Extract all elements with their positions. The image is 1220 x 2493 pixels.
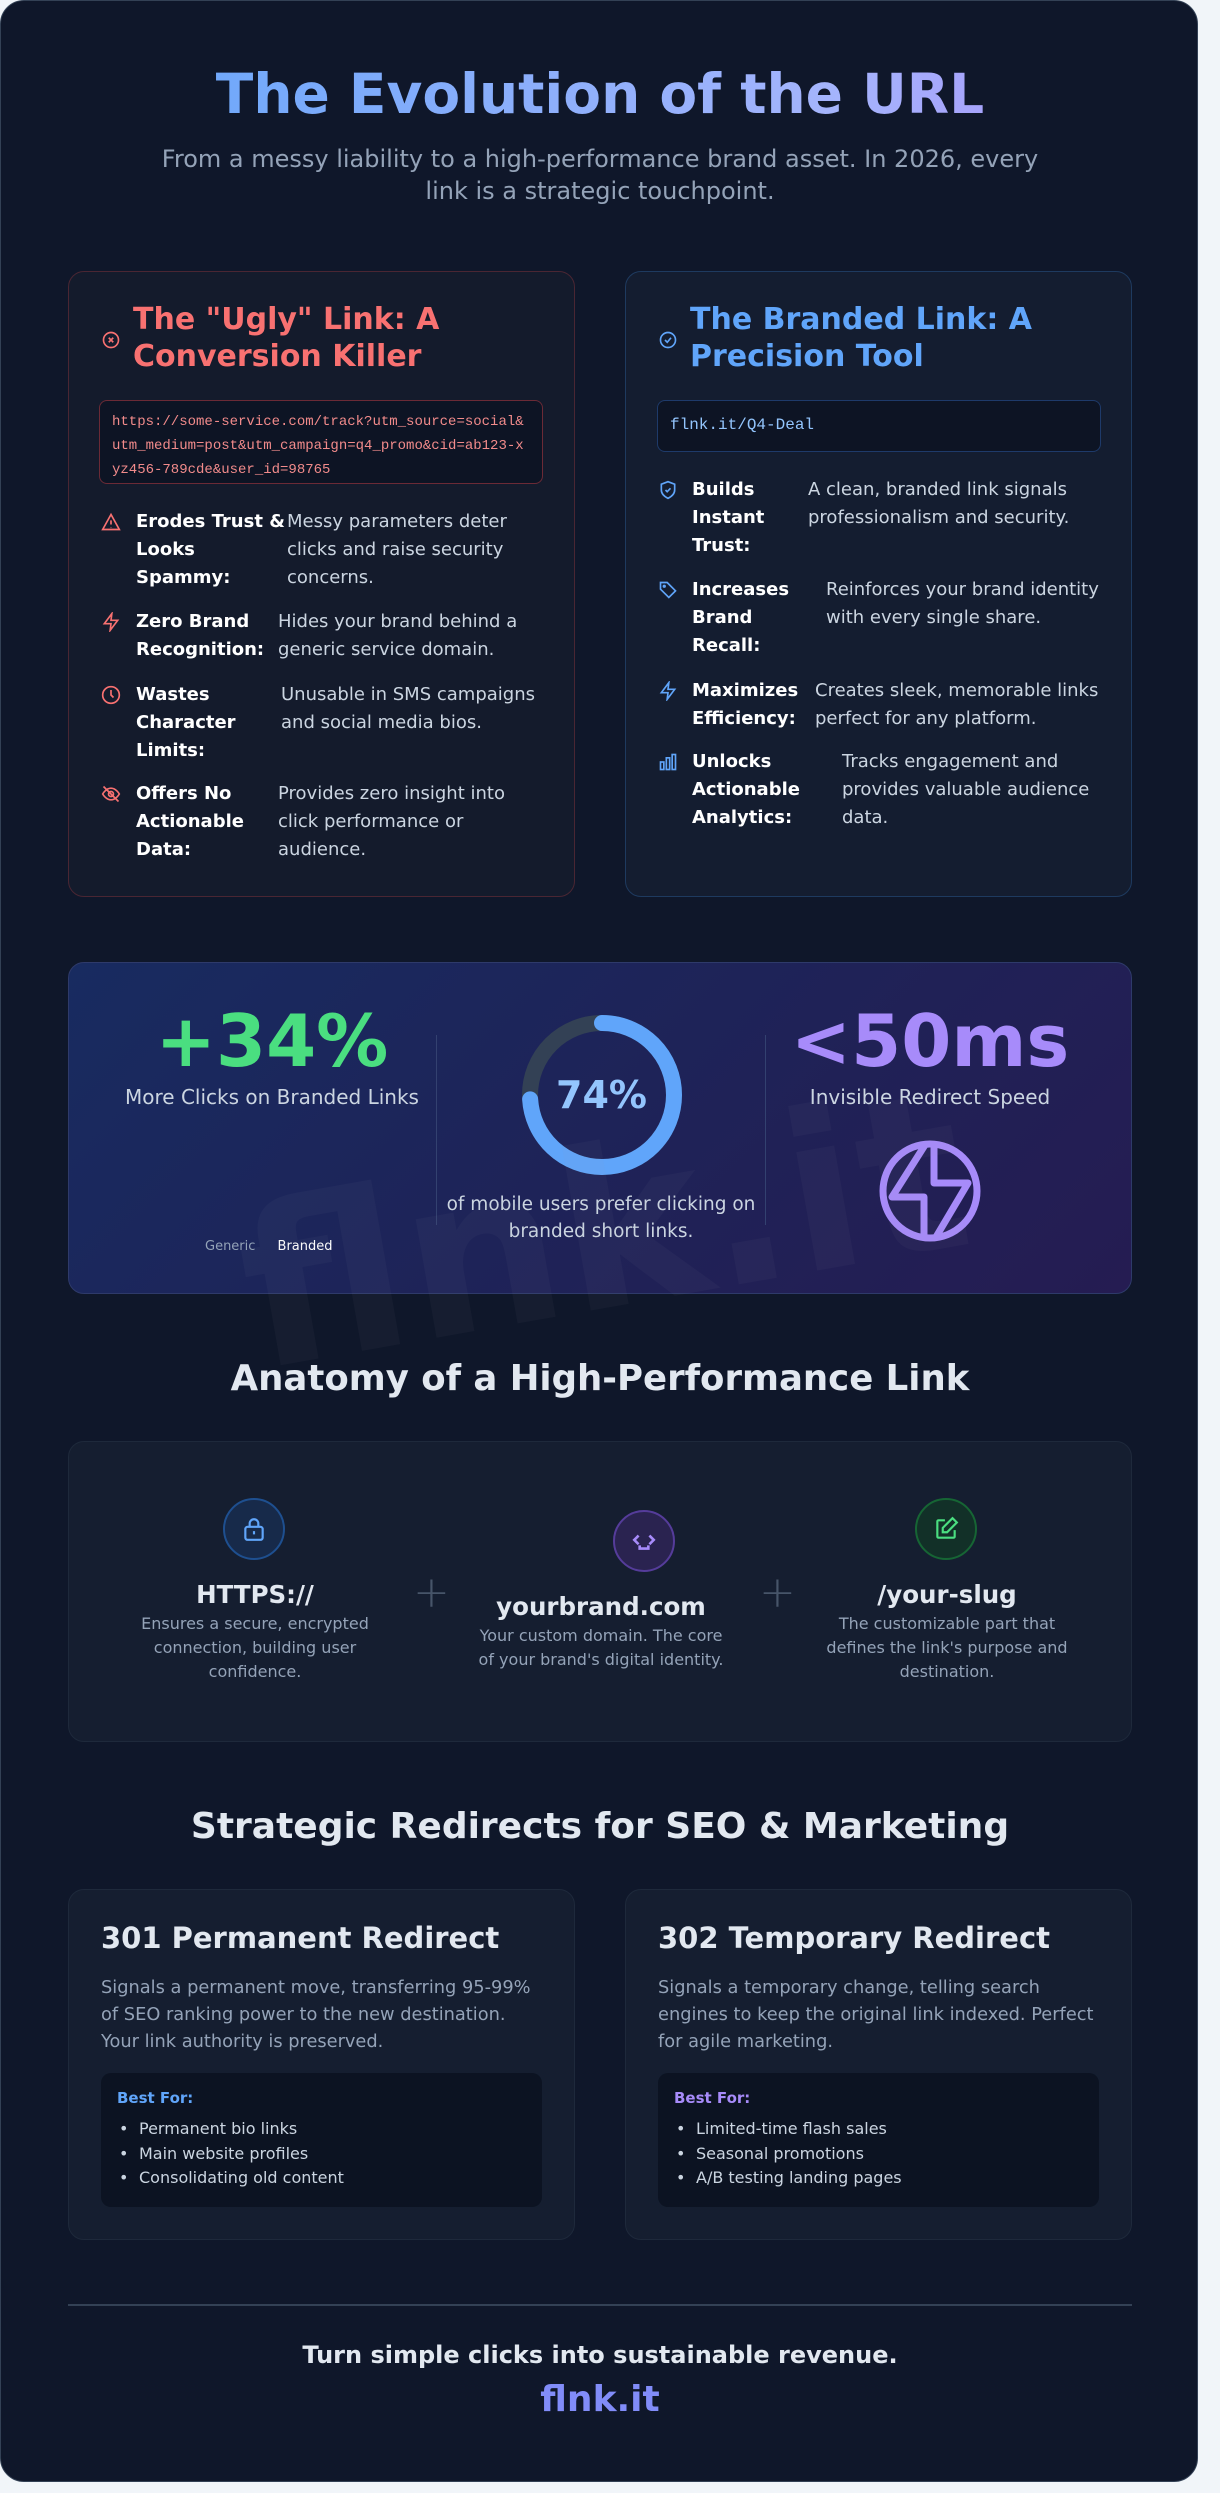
part: domain bbox=[479, 1592, 723, 1669]
item: erodes trust: Messy parameters deter clicks and raise security concerns. bbox=[287, 511, 507, 588]
heading: branded link: The Branded Link: A Precision Tool bbox=[690, 302, 1032, 374]
title bbox=[1, 59, 1199, 129]
item: analytics: Unlocks Actionable Analytics: bbox=[692, 751, 800, 828]
item: erodes trust: Erodes Trust & Looks Spammy: bbox=[136, 511, 285, 588]
panel: stats bbox=[68, 962, 1132, 1294]
item: zero brand: Hides your brand behind a generic service domain. bbox=[278, 611, 517, 660]
icon: x circle bbox=[102, 332, 120, 348]
icon: zap circle bbox=[880, 1140, 980, 1242]
part: domain: Your custom domain. The core of your brand's digital identity. bbox=[479, 1626, 723, 1669]
stat: speed: Invisible Redirect Speed bbox=[810, 1085, 1050, 1109]
icon: eye off bbox=[102, 786, 120, 802]
icon: shield bbox=[660, 480, 676, 500]
best for 302: Limited-time flash sales bbox=[696, 2119, 887, 2138]
part: https: Ensures a secure, encrypted connection, building user confidence. bbox=[141, 1614, 369, 1681]
stat: clicks bbox=[125, 999, 419, 1254]
stat: clicks: More Clicks on Branded Links bbox=[125, 1085, 419, 1109]
stat: donut: 74% bbox=[556, 1073, 647, 1117]
item: recall: Reinforces your brand identity with every single share. bbox=[826, 579, 1099, 628]
stat: donut: of mobile users prefer clicking on branded short links. bbox=[447, 1194, 755, 1242]
item: erodes trust bbox=[136, 511, 507, 588]
item: analytics bbox=[692, 751, 1089, 828]
icon: warning bbox=[101, 512, 121, 530]
watermark: flnk.it bbox=[222, 1042, 986, 1420]
best for 301 bbox=[101, 2073, 542, 2207]
branded url box bbox=[657, 400, 1101, 452]
icon: clock bbox=[102, 686, 120, 704]
heading: ugly link: The "Ugly" Link: A Conversion Killer bbox=[133, 302, 439, 374]
best for 301: Best For: bbox=[117, 2089, 193, 2107]
icon: bolt bbox=[102, 612, 120, 632]
plus: + bbox=[413, 1567, 450, 1618]
item: trust: Builds Instant Trust: bbox=[692, 479, 764, 556]
item: efficiency bbox=[692, 680, 1098, 729]
best for 302 bbox=[658, 2073, 1099, 2207]
item: wastes bbox=[136, 684, 535, 761]
divider bbox=[436, 1035, 437, 1225]
panel: 301: Signals a permanent move, transferring 95-99% of SEO ranking power to the new destination. Your link authority is preserved. bbox=[101, 1977, 531, 2052]
legend: Generic Branded bbox=[205, 1239, 333, 1254]
footer brand: flnk.it bbox=[540, 2379, 660, 2420]
item: wastes: Wastes Character Limits: bbox=[136, 684, 236, 761]
stat: clicks: +34% bbox=[156, 999, 388, 1083]
part: https bbox=[141, 1580, 369, 1681]
icon: lock bbox=[223, 1498, 285, 1560]
best for 301: Main website profiles bbox=[139, 2144, 308, 2162]
panel: 302 bbox=[625, 1889, 1132, 2240]
best for 301: Consolidating old content bbox=[139, 2168, 344, 2187]
item: analytics: Tracks engagement and provides valuable audience data. bbox=[842, 751, 1089, 828]
best for 302: Best For: bbox=[674, 2089, 750, 2107]
icon: bar chart bbox=[660, 754, 676, 770]
icon: edit bbox=[915, 1498, 977, 1560]
heading: anatomy: Anatomy of a High-Performance Link bbox=[231, 1358, 969, 1399]
part: https: HTTPS:// bbox=[196, 1580, 314, 1609]
icon: check circle bbox=[660, 332, 676, 348]
item: zero brand: Zero Brand Recognition: bbox=[136, 611, 264, 660]
panel: 301: 301 Permanent Redirect bbox=[101, 1921, 499, 1955]
panel: branded link bbox=[625, 271, 1132, 897]
item: efficiency: Maximizes Efficiency: bbox=[692, 680, 798, 729]
item: recall: Increases Brand Recall: bbox=[692, 579, 789, 656]
branded url box: flnk.it/Q4-Deal bbox=[670, 416, 814, 434]
footer tagline: Turn simple clicks into sustainable revenue. bbox=[302, 2341, 898, 2369]
plus: + bbox=[759, 1567, 796, 1618]
panel: 302: Signals a temporary change, telling search engines to keep the original link indexed. Perfect for agile marketing. bbox=[658, 1977, 1094, 2052]
stat: speed bbox=[791, 999, 1069, 1242]
heading: redirects: Strategic Redirects for SEO & Marketing bbox=[191, 1806, 1009, 1847]
best for 302: A/B testing landing pages bbox=[696, 2168, 902, 2187]
stat: donut bbox=[447, 1015, 755, 1242]
item: no data bbox=[136, 783, 505, 860]
icon: bolt blue bbox=[660, 681, 676, 701]
item: trust: A clean, branded link signals professionalism and security. bbox=[808, 479, 1069, 528]
panel: 301 bbox=[68, 1889, 575, 2240]
item: trust bbox=[692, 479, 1069, 556]
part: domain: yourbrand.com bbox=[496, 1592, 706, 1621]
item: wastes: Unusable in SMS campaigns and social media bios. bbox=[281, 684, 535, 733]
part: slug bbox=[826, 1580, 1068, 1681]
best for 301: Permanent bio links bbox=[139, 2119, 297, 2138]
icon: code bbox=[613, 1510, 675, 1572]
item: zero brand bbox=[136, 611, 517, 660]
best for 302: Seasonal promotions bbox=[696, 2144, 864, 2162]
panel: 302: 302 Temporary Redirect bbox=[658, 1921, 1050, 1955]
ugly url box: https://some-service.com/track?utm_source=social&utm_medium=post&utm_campaign=q4_promo&cid=ab123-xyz456-789cde&user_id=98765 bbox=[112, 414, 524, 478]
part: slug: The customizable part that defines the link's purpose and destination. bbox=[826, 1614, 1068, 1681]
title: The Evolution of the URL bbox=[216, 62, 984, 126]
item: recall bbox=[692, 579, 1099, 656]
subtitle: From a messy liability to a high-performance brand asset. In 2026, every link is a strategic touchpoint. bbox=[162, 145, 1038, 205]
icon: tag bbox=[660, 582, 677, 599]
panel: anatomy bbox=[68, 1441, 1132, 1742]
panel: ugly link bbox=[68, 271, 575, 897]
stat: speed: <50ms bbox=[791, 999, 1069, 1083]
item: efficiency: Creates sleek, memorable links perfect for any platform. bbox=[815, 680, 1098, 729]
part: slug: /your-slug bbox=[877, 1580, 1017, 1609]
item: no data: Offers No Actionable Data: bbox=[136, 783, 244, 860]
item: no data: Provides zero insight into click performance or audience. bbox=[278, 783, 505, 860]
divider bbox=[765, 1035, 766, 1225]
